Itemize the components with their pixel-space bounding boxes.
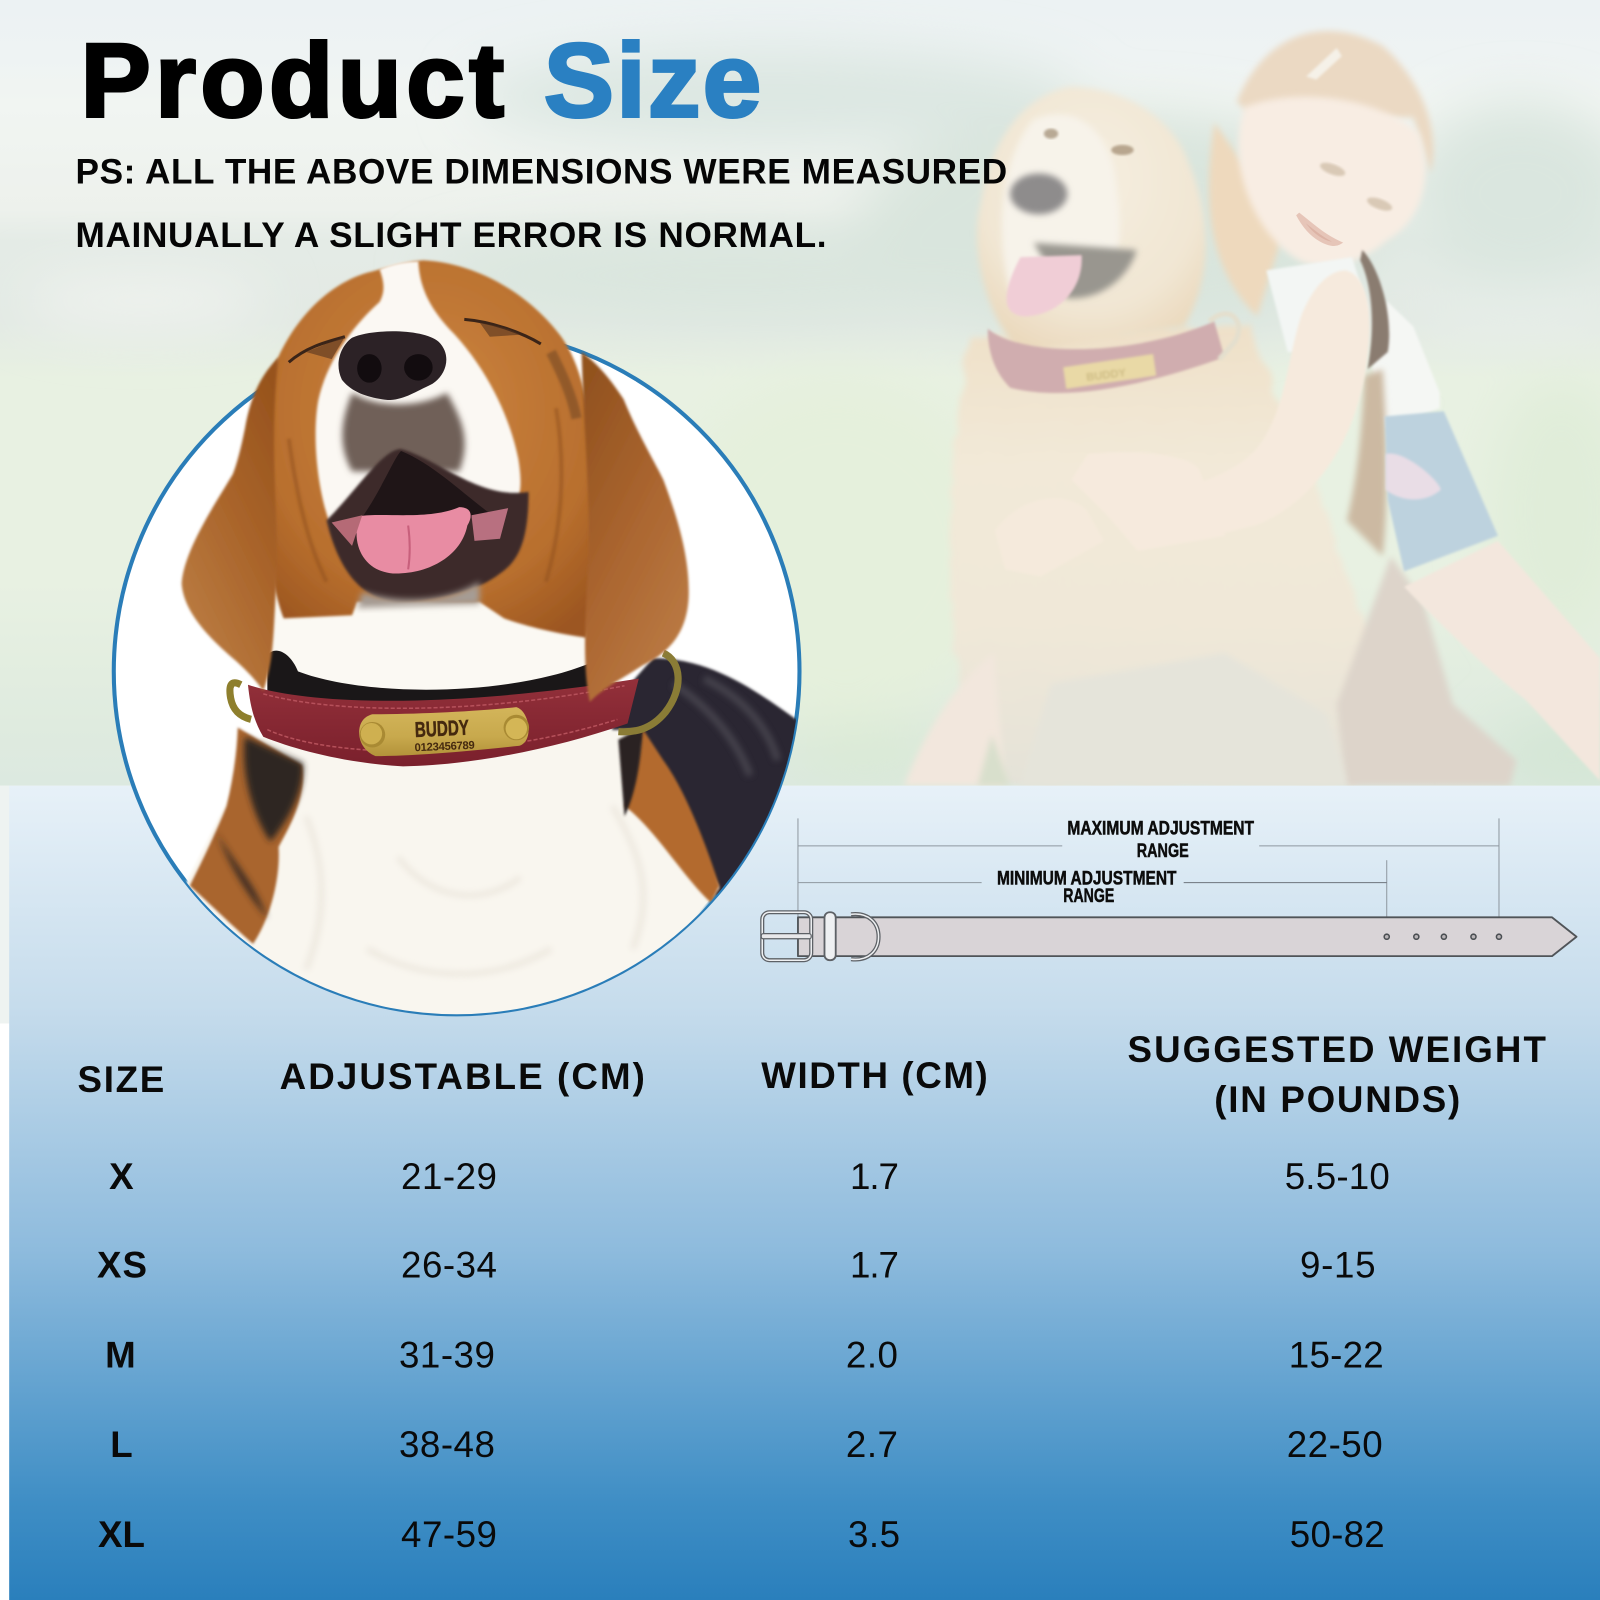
title: Product	[81, 22, 504, 139]
row L: 22-50	[1287, 1424, 1383, 1465]
size table	[78, 1029, 1546, 1555]
belt keeper loop	[824, 912, 836, 960]
row M: 2.0	[846, 1334, 898, 1375]
row XL: 3.5	[848, 1514, 900, 1555]
min range label	[997, 868, 1177, 907]
bottom gradient panel	[0, 786, 1600, 1600]
nose	[339, 331, 446, 400]
golden retriever (faded)	[904, 87, 1516, 786]
measurement note	[76, 153, 1007, 255]
row L: 38-48	[399, 1424, 495, 1465]
dimension lines	[798, 818, 1499, 937]
red leather collar with brass plate	[230, 651, 678, 766]
beagle photo circle	[114, 260, 806, 1031]
row M: 15-22	[1289, 1334, 1384, 1375]
row X: 21-29	[401, 1156, 497, 1197]
table headers	[78, 1029, 1546, 1120]
min range label: MINIMUM ADJUSTMENT	[997, 868, 1177, 890]
row XS: XS	[97, 1245, 147, 1286]
buckle	[762, 912, 811, 960]
measurement note: PS: ALL THE ABOVE DIMENSIONS WERE MEASURED	[76, 153, 1007, 192]
row L: 2.7	[846, 1424, 898, 1465]
tongue	[357, 507, 471, 574]
row XL: 50-82	[1290, 1514, 1385, 1555]
left ear	[182, 357, 279, 691]
closed eyes	[289, 337, 345, 362]
D-ring left	[230, 683, 251, 719]
name plate	[359, 707, 529, 756]
table headers: WIDTH (CM)	[761, 1055, 988, 1096]
row XL: XL	[98, 1514, 145, 1555]
row L: L	[110, 1424, 133, 1465]
table headers: SUGGESTED WEIGHT	[1128, 1029, 1546, 1070]
row M	[105, 1334, 1384, 1375]
table headers: ADJUSTABLE (CM)	[280, 1056, 645, 1097]
red leather collar with brass plate: 0123456789	[414, 740, 475, 754]
row XL: 47-59	[401, 1514, 497, 1555]
row M: 31-39	[399, 1334, 495, 1375]
white circle with blue outline	[114, 329, 799, 1014]
measurement note: MAINUALLY A SLIGHT ERROR IS NORMAL.	[76, 216, 827, 255]
table headers: (IN POUNDS)	[1214, 1079, 1460, 1120]
faded background photo: girl hugging golden retriever in a meadow	[0, 0, 1600, 786]
row X: 1.7	[850, 1156, 899, 1197]
D-ring right	[618, 653, 678, 732]
row L	[110, 1424, 1383, 1465]
girl (faded)	[995, 31, 1600, 781]
row XL	[98, 1514, 1385, 1555]
table headers: SIZE	[78, 1059, 164, 1100]
title	[81, 22, 761, 139]
max range label	[1067, 818, 1254, 862]
row XS: 9-15	[1300, 1245, 1376, 1286]
row X	[109, 1156, 1390, 1197]
title: Size	[544, 22, 761, 139]
row XS	[97, 1245, 1376, 1286]
max range label: MAXIMUM ADJUSTMENT	[1067, 818, 1254, 840]
row M: M	[105, 1334, 136, 1375]
row X: 5.5-10	[1285, 1156, 1390, 1197]
belt holes	[1384, 934, 1502, 939]
belt adjustment diagram	[761, 818, 1577, 960]
right ear	[582, 352, 689, 702]
D-ring	[851, 914, 879, 959]
red leather collar with brass plate: BUDDY	[414, 716, 469, 742]
beagle body	[184, 658, 806, 1031]
min range label: RANGE	[1063, 885, 1114, 907]
row X: X	[109, 1156, 134, 1197]
row XS: 26-34	[401, 1245, 497, 1286]
white neck	[267, 582, 597, 696]
row XS: 1.7	[850, 1245, 899, 1286]
faded collar on retriever: BUDDY	[1086, 367, 1127, 384]
belt strap	[798, 917, 1577, 956]
max range label: RANGE	[1137, 840, 1189, 862]
beagle head	[261, 260, 599, 638]
faded collar on retriever	[988, 314, 1239, 393]
